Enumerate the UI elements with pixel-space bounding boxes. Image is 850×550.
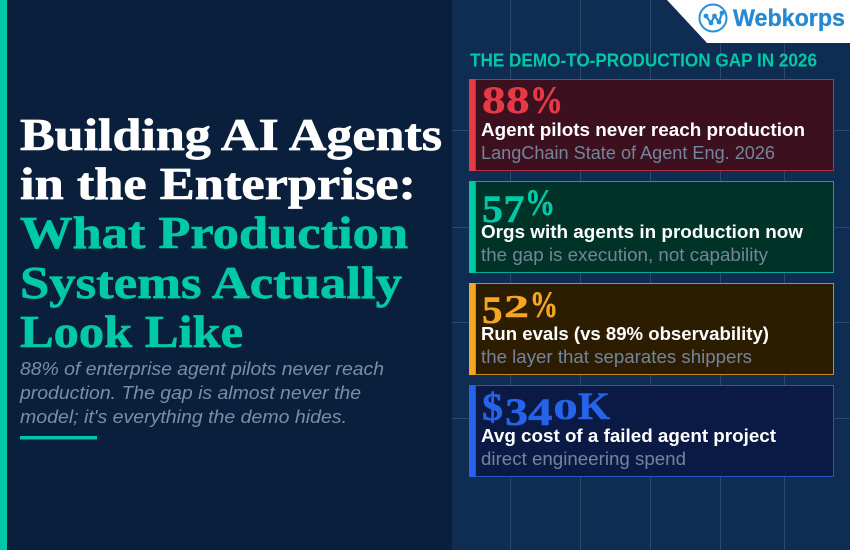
stat source: LangChain State of Agent Eng. 2026 xyxy=(481,142,775,163)
stat value xyxy=(482,385,611,434)
stat value xyxy=(482,183,555,231)
subtitle text xyxy=(19,359,384,427)
title: Building AI Agents xyxy=(20,110,442,160)
stat value: % xyxy=(530,285,558,326)
stat value: 0 xyxy=(554,395,578,426)
title xyxy=(20,110,442,357)
stat note: direct engineering spend xyxy=(481,448,686,469)
stat value: 4 xyxy=(528,391,552,434)
panel: stat card 52% xyxy=(469,283,834,375)
stat value: 3 xyxy=(505,391,528,434)
stat value xyxy=(482,79,563,122)
stat note: the gap is execution, not capability xyxy=(481,244,769,265)
stat value: 7 xyxy=(504,188,524,231)
subtitle text: 88% of enterprise agent pilots never reach xyxy=(20,359,384,379)
icon: Webkorps circle mark xyxy=(700,4,726,32)
stat value: $ xyxy=(482,386,503,429)
stat label: Run evals (vs 89% observability) xyxy=(481,323,769,344)
panel: stat card $340K xyxy=(469,385,834,477)
stat value: 5 xyxy=(482,289,502,332)
stat value xyxy=(482,285,558,332)
stat label: Orgs with agents in production now xyxy=(481,221,804,242)
accent bar: left edge xyxy=(0,0,7,550)
subtitle text: production. The gap is almost never the xyxy=(19,383,361,403)
logo: Webkorps: Webkorps xyxy=(733,5,845,32)
stat value: K xyxy=(578,385,611,428)
title: Look Like xyxy=(20,307,243,357)
stat value: 2 xyxy=(504,288,529,324)
stat value: 5 xyxy=(482,188,503,231)
title: What Production xyxy=(20,208,408,258)
stat note: the layer that separates shippers xyxy=(481,346,752,367)
logo: Webkorps xyxy=(667,0,850,43)
stat value: 8 xyxy=(482,79,506,122)
panel: stat card 57% xyxy=(469,181,834,273)
panel: right background with grid xyxy=(452,0,850,550)
accent rule under subtitle xyxy=(20,436,97,440)
section heading: THE DEMO-TO-PRODUCTION GAP IN 2026 xyxy=(470,50,817,70)
stat label: Avg cost of a failed agent project xyxy=(481,425,776,446)
stat value: % xyxy=(530,79,563,122)
title: in the Enterprise: xyxy=(20,159,416,209)
stat value: % xyxy=(525,183,555,224)
stat label: Agent pilots never reach production xyxy=(481,119,805,140)
subtitle text: model; it's everything the demo hides. xyxy=(20,407,347,427)
stat value: 8 xyxy=(506,79,530,122)
panel: stat card 88% xyxy=(469,79,834,171)
title: Systems Actually xyxy=(20,258,403,308)
